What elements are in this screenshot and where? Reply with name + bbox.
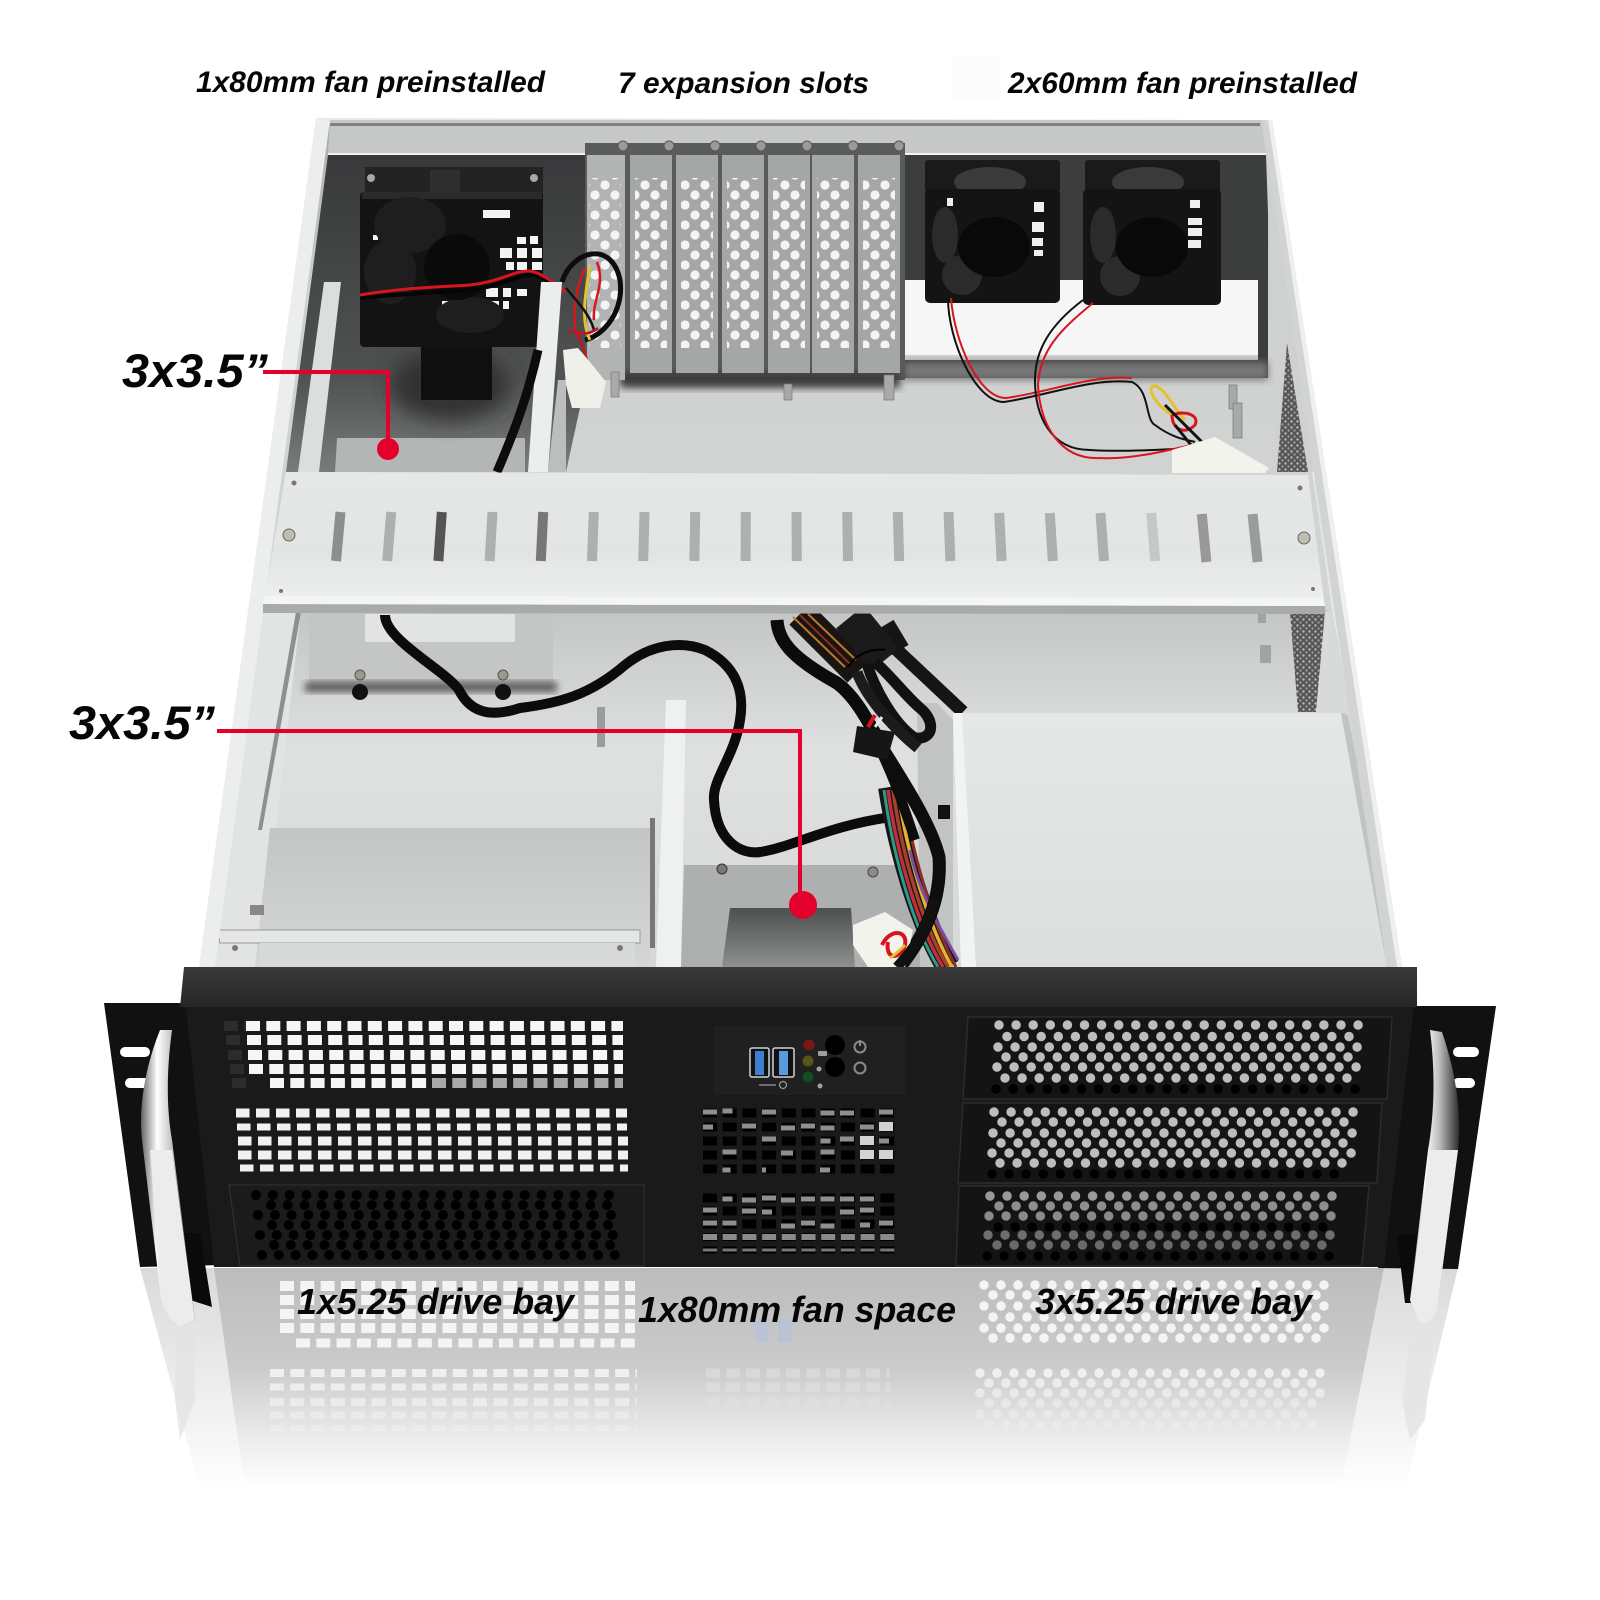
buttons <box>825 1035 845 1077</box>
middle drive rail face <box>528 282 562 472</box>
rear wall dark left <box>286 155 586 472</box>
power supply block <box>953 713 1396 967</box>
fan blades seen through grid <box>703 1111 893 1226</box>
callout: lower 3x3.5 bay <box>69 696 817 919</box>
main black cables <box>777 620 885 750</box>
marker dot <box>789 891 817 919</box>
slot cover 6 <box>812 155 854 373</box>
left handle <box>141 1030 212 1327</box>
label: triple drive bay: 3x5.25 drive bay <box>1035 1281 1314 1322</box>
standoff lower <box>597 707 605 747</box>
rear wall top strip <box>328 120 1266 155</box>
bright highlights <box>860 1122 893 1159</box>
60mm fan left <box>925 160 1060 303</box>
upper left vent grid <box>224 1026 623 1083</box>
slot cover 1 <box>587 155 625 380</box>
reflected left grids <box>270 1286 637 1428</box>
three 5.25 bays <box>956 1017 1392 1266</box>
rear wall dark right <box>903 155 1268 378</box>
standoffs lower right <box>1258 613 1271 663</box>
slot screws <box>618 141 904 151</box>
middle drive rail <box>548 380 566 472</box>
chassis side rails <box>199 118 1402 967</box>
upper floor <box>262 125 1332 610</box>
floor reflection <box>140 1268 1458 1490</box>
fan window <box>947 198 1044 256</box>
center drive plate <box>681 864 920 967</box>
left rack ear <box>104 1003 222 1267</box>
label: fan space: 1x80mm fan space <box>638 1289 956 1330</box>
fan hub <box>1116 217 1188 277</box>
rear opening <box>905 280 1258 360</box>
60mm fan wires <box>948 298 1210 458</box>
slot cover 7 <box>858 155 900 373</box>
right handle <box>1397 1030 1459 1323</box>
fan hub <box>958 217 1030 277</box>
middle left vent grid <box>236 1113 628 1168</box>
marker dot <box>377 438 399 460</box>
right inner wall <box>1262 125 1330 600</box>
lower drive cage <box>217 818 655 967</box>
leds <box>802 1040 814 1082</box>
front io panel <box>714 1026 905 1095</box>
lower left wall <box>215 610 301 967</box>
callout: upper 3x3.5 bay <box>122 344 399 460</box>
thick black power cable <box>385 615 892 852</box>
reflected center grid <box>706 1373 890 1415</box>
power and reset icons <box>854 1040 866 1074</box>
bay 2 <box>958 1103 1382 1183</box>
left drive cage plate <box>335 438 525 472</box>
bright lower rows <box>703 1237 895 1250</box>
bottom molex <box>853 900 935 967</box>
leader line <box>217 731 800 905</box>
fan window <box>1188 200 1202 248</box>
status icons <box>816 1051 827 1088</box>
cable loops <box>867 662 931 738</box>
label: 3x3.5” <box>69 696 216 749</box>
reflected right bay dots <box>980 1285 1340 1424</box>
wire knot <box>1151 386 1185 420</box>
label: expansion slots: 7 expansion slots <box>618 67 869 100</box>
single 5.25 bay <box>229 1185 644 1266</box>
faint patch behind label <box>953 55 1001 100</box>
bay 3 <box>956 1186 1369 1266</box>
reflected handles <box>175 1325 195 1440</box>
fan guard window <box>373 210 542 309</box>
label: single drive bay: 1x5.25 drive bay <box>297 1281 576 1322</box>
center fan grids <box>703 1111 895 1250</box>
black cable stub <box>938 805 950 819</box>
bay 1 <box>963 1017 1392 1099</box>
slot cover 4 <box>722 155 764 373</box>
reflected usb <box>755 1318 792 1342</box>
label: 3x3.5” <box>122 344 269 397</box>
slot cover 2 <box>630 155 672 373</box>
60mm fan right <box>1083 160 1221 305</box>
chassis front <box>104 967 1496 1327</box>
fan blades <box>364 197 504 333</box>
vent slots <box>336 512 1258 562</box>
header wires <box>868 715 875 727</box>
header connector <box>853 726 895 760</box>
black power cable upper <box>497 350 538 472</box>
middle vertical rail <box>656 700 686 967</box>
front panel <box>186 1007 1414 1267</box>
drive cage upper <box>305 613 557 700</box>
case tray <box>199 118 1402 967</box>
leader line <box>263 372 388 449</box>
lower right vent <box>1290 612 1325 712</box>
top lid edge <box>180 967 1417 1007</box>
usb ports <box>750 1048 794 1077</box>
fan wires <box>360 275 560 298</box>
fan hub <box>424 234 490 300</box>
psu wire bundle <box>777 614 958 967</box>
expansion slots <box>585 141 905 388</box>
ribbon stripes <box>890 787 948 967</box>
label: 80mm fan: 1x80mm fan preinstalled <box>196 66 546 99</box>
right rack ear <box>1378 1006 1496 1269</box>
slot cover 3 <box>676 155 718 373</box>
psu thick cable <box>885 625 963 712</box>
lower floor <box>212 610 1395 967</box>
left drive rail <box>298 282 341 472</box>
cable loop and molex <box>562 254 621 408</box>
psu side rail <box>917 703 953 967</box>
cross brace with slots <box>263 472 1325 614</box>
chassis rear interior <box>199 118 1402 967</box>
molex right <box>1172 437 1269 473</box>
usb symbol <box>759 1082 786 1088</box>
slot cover 5 <box>768 155 810 373</box>
80mm fan <box>360 167 566 421</box>
standoffs <box>611 372 1242 438</box>
label: 60mm fans: 2x60mm fan preinstalled <box>1007 67 1358 100</box>
